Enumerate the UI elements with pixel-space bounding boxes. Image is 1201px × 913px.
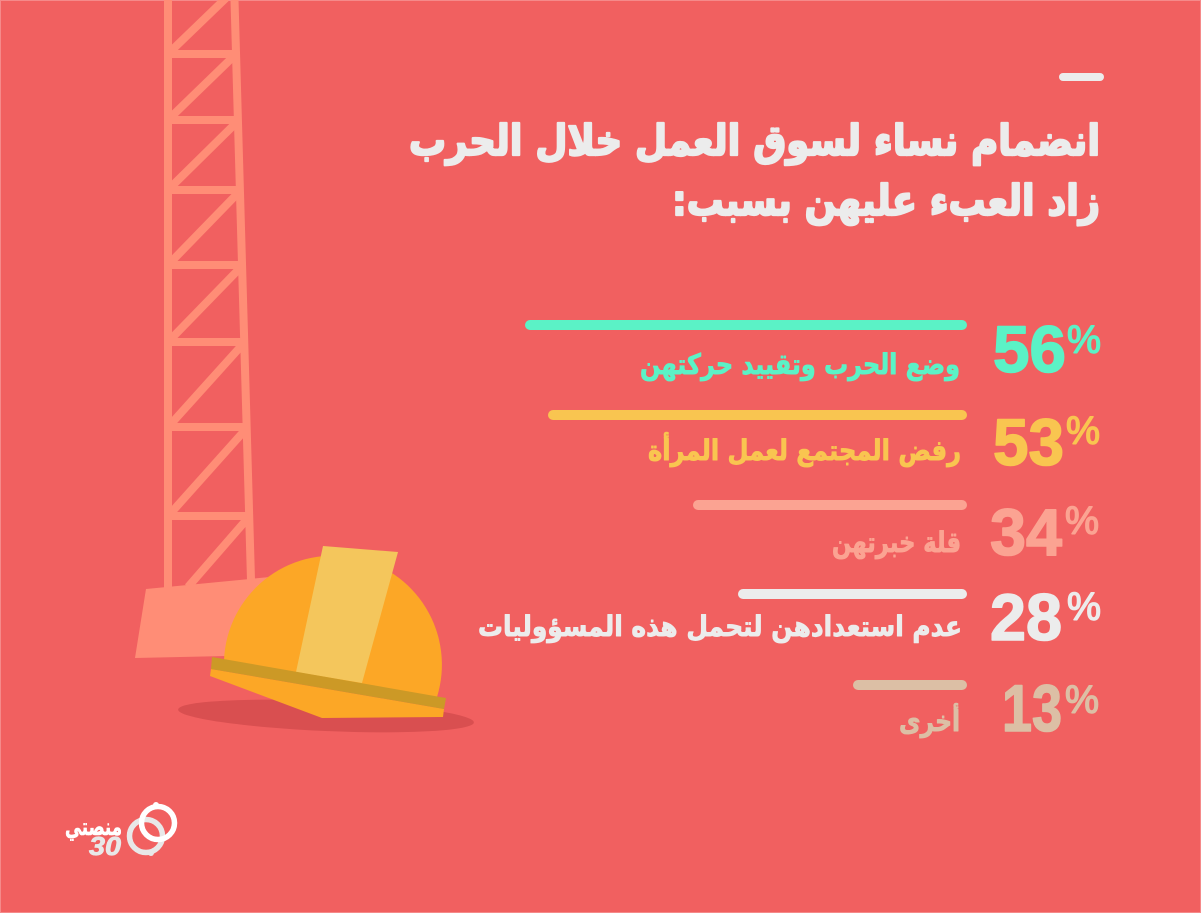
row: 13%: أخرى [899,703,960,738]
illustration: helmet shadow [177,695,475,737]
row: 53%: رفض المجتمع لعمل المرأة [648,432,961,467]
title: زاد العبء عليهن بسبب: [672,176,1100,226]
row: 28%: عدم استعدادهن لتحمل هذه المسؤوليات [478,610,962,643]
row: 28% [478,580,1101,654]
row: 34% [693,495,1099,569]
row: 13%: % [1065,679,1099,722]
row: 34%: % [1065,500,1099,543]
row: 28%: % [1067,586,1101,629]
illustration: helmet [210,546,446,718]
row: 28%: 28 [990,580,1062,654]
row: 56%: % [1067,319,1101,362]
row: 13% [853,671,1099,745]
illustration: crane base [135,577,270,658]
logo [65,802,174,861]
row: 53% [548,405,1100,479]
row: 13%: 13 [1002,671,1062,745]
row: 56%: 56 [993,312,1066,386]
title [409,116,1100,226]
logo: 30 [89,831,122,861]
row: 34%: قلة خبرتهن [832,526,961,559]
row: 56% [525,312,1101,386]
row: 53%: 53 [993,405,1064,479]
row: 34%: 34 [990,495,1062,569]
illustration: crane tower [168,0,251,590]
row: 53%: % [1066,410,1100,453]
title: انضمام نساء لسوق العمل خلال الحرب [409,116,1100,166]
row: 56%: وضع الحرب وتقييد حركتهن [640,348,960,381]
accent dash [1059,73,1104,81]
logo: منصتي [65,813,122,841]
